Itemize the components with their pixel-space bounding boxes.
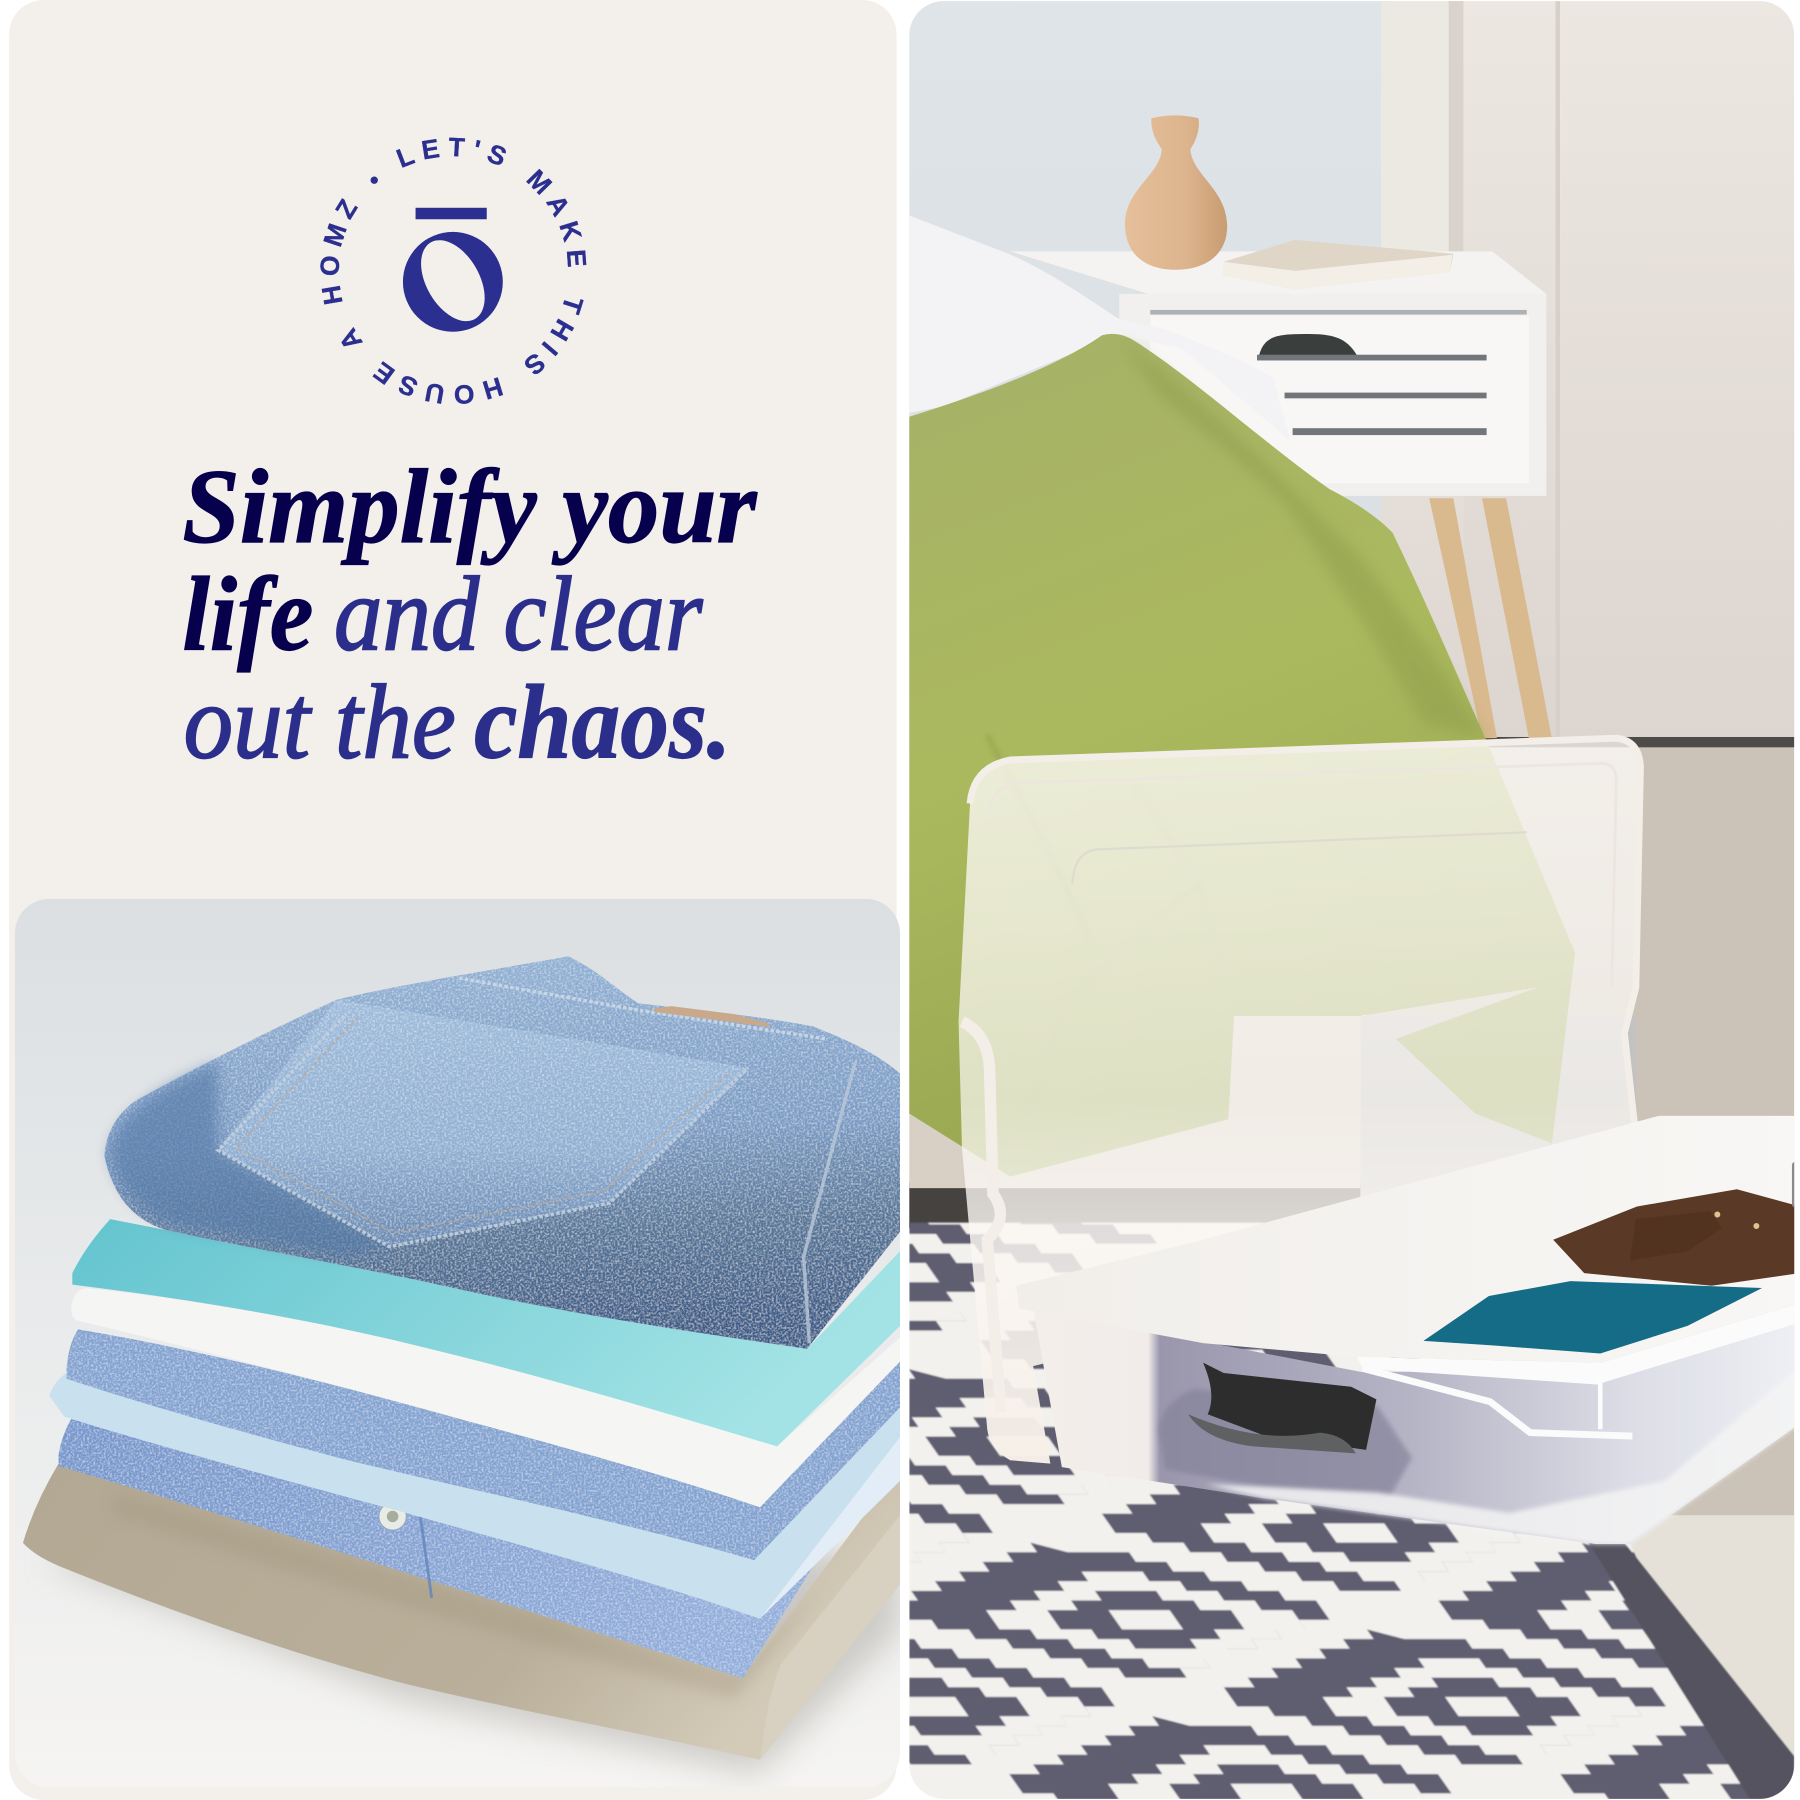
storage box <box>1016 1116 1800 1544</box>
teal tee <box>72 1219 900 1446</box>
side clip on far edge <box>1792 1162 1800 1208</box>
logo macron bar <box>416 208 487 219</box>
door frame <box>1381 0 1794 739</box>
heading: simplify your life and clear out the chaos: and clear <box>334 556 703 673</box>
nightstand legs <box>1429 498 1552 739</box>
folded jeans <box>104 956 900 1349</box>
photo: bedroom scene with under-bed storage box <box>895 0 1800 1800</box>
heading: simplify your life and clear out the chaos <box>183 448 757 781</box>
light blue tee <box>49 1373 900 1619</box>
bedroom wall <box>909 0 1391 758</box>
bed base <box>909 1010 1360 1188</box>
white tee <box>71 1288 900 1507</box>
folded brown garment <box>1553 1189 1800 1286</box>
vase <box>1125 115 1227 270</box>
heading: simplify your life and clear out the chaos: life <box>183 556 313 673</box>
leather patch <box>654 1008 769 1025</box>
lavender blob around handle <box>1158 1389 1412 1498</box>
shirt button <box>379 1503 406 1530</box>
khaki trousers <box>23 1464 900 1760</box>
pillow <box>910 216 1120 413</box>
rug border <box>1561 1527 1794 1800</box>
rim strip <box>1357 1303 1800 1384</box>
photo backdrop <box>15 899 900 1787</box>
logo: circular badge <box>320 138 586 404</box>
storage box lid <box>959 738 1640 1464</box>
logo ring text: LET'S MAKE THIS HOUSE A HOMZ <box>320 138 586 404</box>
back pocket <box>218 1000 748 1247</box>
fly seam <box>804 1062 855 1343</box>
box top rim <box>1016 1116 1800 1363</box>
box base front wall <box>1033 1309 1800 1544</box>
floor gap under bed <box>1360 1016 1636 1223</box>
photo: stack of folded clothes <box>15 899 900 1787</box>
heading: simplify your life and clear out the chaos: chaos. <box>474 664 731 781</box>
floor <box>909 737 1800 1800</box>
folded teal sweater <box>1423 1281 1762 1353</box>
nightstand <box>1010 251 1546 496</box>
stack shadow <box>46 1492 900 1774</box>
handle strip <box>1363 1368 1632 1436</box>
logo letter o <box>403 229 503 332</box>
chambray shirt <box>59 1419 813 1678</box>
panel: left cream background <box>9 0 897 1800</box>
black clip handle <box>1188 1363 1376 1453</box>
denim shirt <box>67 1329 900 1560</box>
rug <box>909 1223 1794 1800</box>
heading: simplify your life and clear out the chaos: Simplify your <box>183 448 757 565</box>
logo dot <box>371 177 378 184</box>
light folded edges right <box>760 1437 900 1619</box>
green blanket <box>909 334 1575 1177</box>
heading: simplify your life and clear out the chaos: out the <box>184 664 456 781</box>
book <box>1224 240 1453 289</box>
bottom pale edge <box>1205 1366 1800 1544</box>
waistband seam <box>459 978 827 1039</box>
